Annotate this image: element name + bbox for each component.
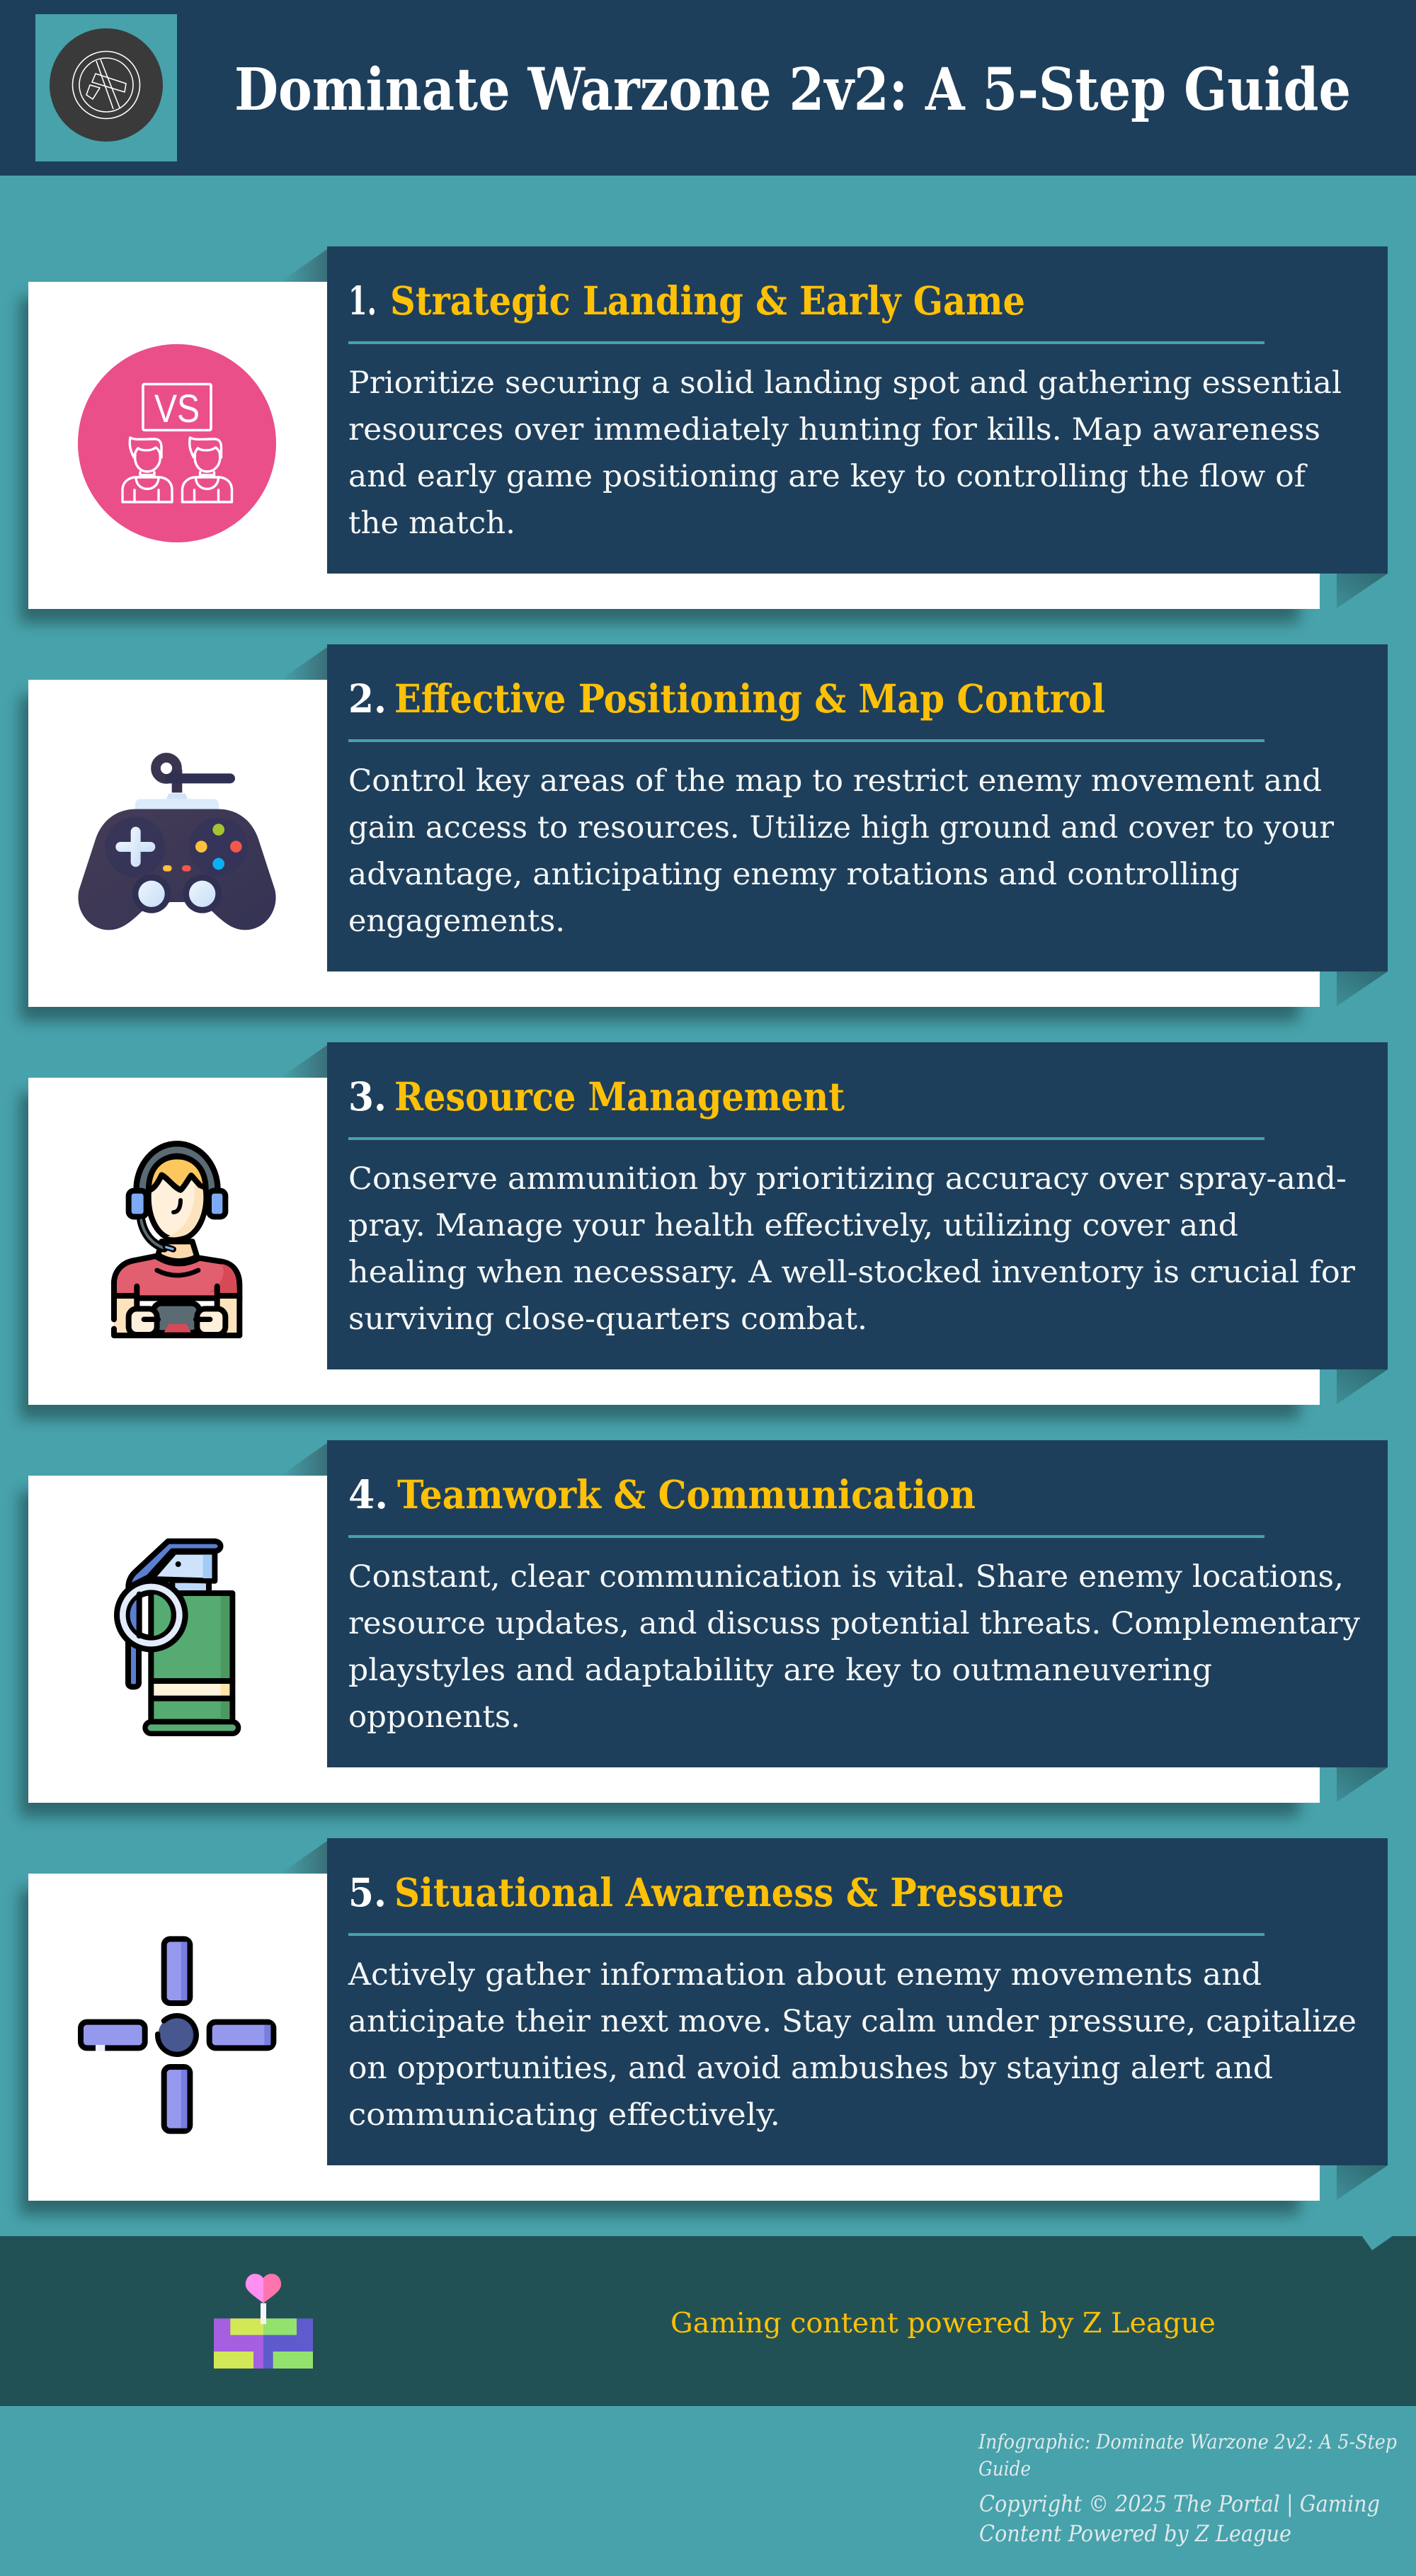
heading: step 4: 4. [348, 1471, 388, 1517]
heading: step 4: Teamwork & Communication [397, 1471, 976, 1517]
panel: step 5 [20, 1838, 1388, 2215]
panel: step 4 [20, 1440, 1388, 1817]
text: step 4 body: playstyles and adaptability are key to outmaneuvering [348, 1653, 1212, 1688]
text: step 1 body: resources over immediately hunting for kills. Map awareness [348, 412, 1320, 448]
icon: gamer with headset [114, 1150, 239, 1335]
text: step 2 body: gain access to resources. Utilize high ground and cover to your [348, 810, 1334, 845]
attribution text: Copyright © 2025 The Portal | Gaming [979, 2490, 1380, 2517]
logo: crossed-out pistol [35, 14, 177, 161]
text: step 3 body: Conserve ammunition by prioritizing accuracy over spray-and- [348, 1161, 1347, 1197]
text: step 4 body: opponents. [348, 1699, 520, 1735]
text: step 4 body [348, 1559, 1361, 1735]
text: step 5 body: on opportunities, and avoid ambushes by staying alert and [348, 2051, 1273, 2086]
heading: step 2: 2. [348, 676, 387, 722]
heading: step 2: Effective Positioning & Map Control [394, 676, 1105, 722]
icon: gift with heart [214, 2274, 313, 2369]
text: step 1 body: and early game positioning are key to controlling the flow of [348, 459, 1308, 494]
attribution text [978, 2430, 1397, 2547]
panel: step 1 [20, 246, 1388, 623]
text: step 5 body: communicating effectively. [348, 2097, 780, 2133]
footer band [0, 2235, 1416, 2406]
text: step 1 body: the match. [348, 506, 515, 541]
text: step 2 body: advantage, anticipating enemy rotations and controlling [348, 857, 1240, 892]
attribution text: Content Powered by Z League [979, 2520, 1291, 2547]
text: step 3 body [348, 1161, 1355, 1337]
panel: step 2 [20, 644, 1388, 1021]
icon: crosshair [81, 1939, 273, 2131]
text: step 4 body: resource updates, and discuss potential threats. Complementary [348, 1606, 1361, 1641]
text: step 2 body: engagements. [348, 904, 565, 939]
icon: versus players: VS [154, 386, 200, 431]
text: step 3 body: healing when necessary. A well-stocked inventory is crucial for [348, 1255, 1355, 1290]
heading: step 3: Resource Management [394, 1073, 845, 1119]
text: step 1 body: Prioritize securing a solid landing spot and gathering essential [348, 365, 1342, 401]
text: step 3 body: surviving close-quarters combat. [348, 1301, 867, 1337]
icon: smoke grenade [117, 1541, 239, 1733]
heading: step 1: 1. [348, 278, 377, 324]
icon: game controller [78, 758, 276, 930]
text: step 5 body: anticipate their next move. Stay calm under pressure, capitalize [348, 2004, 1357, 2039]
panel: step 3 [20, 1042, 1388, 1419]
footer tagline: Gaming content powered by Z League [670, 2308, 1216, 2340]
heading: step 5: 5. [348, 1869, 387, 1915]
text: step 2 body: Control key areas of the map to restrict enemy movement and [348, 763, 1322, 799]
text: step 5 body [348, 1957, 1357, 2133]
attribution text: Guide [978, 2457, 1031, 2480]
heading: step 5: Situational Awareness & Pressure [394, 1869, 1064, 1915]
text: step 2 body [348, 763, 1334, 939]
heading: step 3: 3. [348, 1073, 387, 1119]
header band [0, 0, 1416, 176]
text: step 5 body: Actively gather information about enemy movements and [348, 1957, 1262, 1993]
text: step 4 body: Constant, clear communication is vital. Share enemy locations, [348, 1559, 1344, 1595]
text: step 1 body [348, 365, 1342, 541]
heading: step 1: Strategic Landing & Early Game [390, 278, 1025, 324]
icon: versus players [78, 344, 276, 542]
text: step 3 body: pray. Manage your health effectively, utilizing cover and [348, 1208, 1238, 1243]
